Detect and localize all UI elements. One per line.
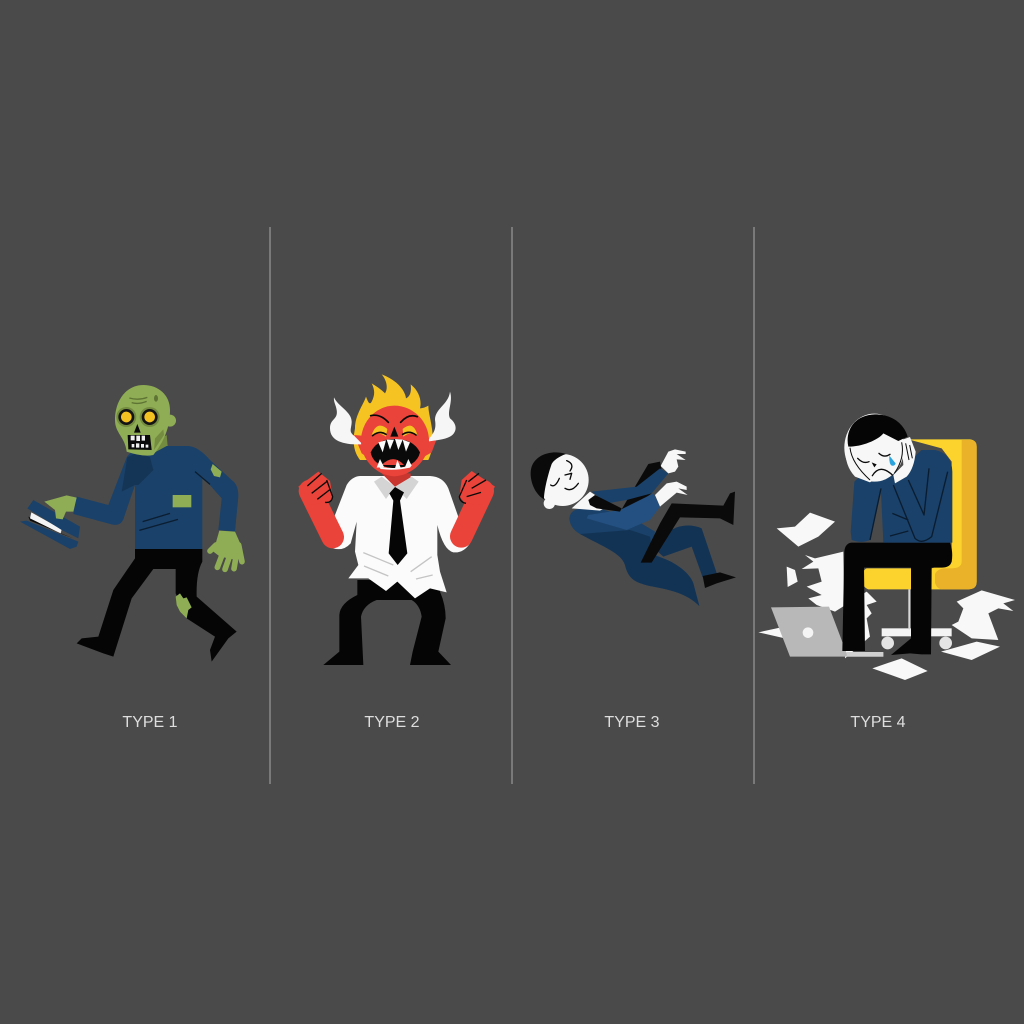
stapler base (20, 521, 78, 549)
figure: type 2 angry devil (298, 374, 495, 665)
sleeper hair (531, 452, 566, 499)
zombie mouth (128, 435, 152, 450)
label: type 3: TYPE 3 (604, 714, 660, 731)
devil arms (298, 471, 495, 537)
sleeper ear (544, 498, 555, 509)
right floor paper (941, 642, 1000, 660)
flying paper top (777, 513, 835, 547)
sweater patch (173, 495, 191, 507)
back arm (622, 462, 662, 512)
stapler (20, 500, 80, 549)
zombie teeth (131, 436, 148, 448)
front sleeve (587, 493, 660, 530)
top sleeve (592, 468, 668, 503)
tear (889, 456, 896, 466)
sleeper face (551, 461, 578, 490)
zombie neck (143, 435, 168, 464)
stapler top (27, 500, 80, 538)
devil nose (390, 427, 398, 437)
flame hair (354, 374, 433, 460)
bottom floor paper (872, 658, 928, 680)
near trouser leg (641, 492, 735, 563)
far shoe (703, 572, 736, 588)
shirt collar (374, 477, 419, 499)
black tie (389, 487, 407, 565)
figure: type 4 crying worker with papers (758, 414, 1015, 680)
devil shirt (324, 476, 470, 598)
jacket shadow (580, 530, 699, 606)
chair back shade (934, 440, 977, 589)
shirt collar and tie (572, 492, 610, 511)
label: type 2: TYPE 2 (364, 714, 420, 731)
worker head (844, 414, 904, 482)
zombie sweater (73, 446, 238, 549)
zombie hand with stapler (44, 495, 77, 519)
paper left of laptop (758, 628, 785, 638)
top hand (661, 449, 686, 473)
devil tongue (382, 459, 404, 465)
lower hand (655, 482, 688, 507)
zombie trousers (77, 549, 237, 662)
forehead marks (129, 397, 147, 403)
staple strip (30, 512, 62, 533)
cheek scar (154, 429, 164, 450)
zombie nose (134, 424, 141, 433)
far leg (647, 526, 717, 577)
zombie eyes (116, 407, 160, 427)
sleeper head (537, 454, 589, 506)
worker sweater (851, 450, 952, 543)
paper pile (802, 552, 877, 658)
label: type 4: TYPE 4 (850, 714, 906, 731)
figure: type 3 falling sleeper (531, 449, 736, 606)
zombie ear (164, 415, 176, 427)
sweater creases (139, 472, 210, 530)
label: type 1: TYPE 1 (122, 714, 178, 731)
left fist (298, 472, 333, 505)
right fist (459, 471, 495, 505)
devil trousers (323, 580, 451, 665)
chair seat (862, 568, 935, 589)
worker nose (872, 462, 877, 467)
shirt creases (363, 553, 433, 579)
worker hair (848, 414, 908, 447)
sweater lines (870, 468, 948, 541)
sweater shadow (122, 452, 153, 492)
smoke left (330, 397, 363, 444)
devil eyes (371, 415, 417, 437)
laptop (771, 607, 883, 657)
left hand on cheek (846, 447, 873, 482)
leg wound (176, 593, 192, 618)
devil mouth (371, 439, 420, 468)
right paper stack (952, 590, 1015, 640)
figure: type 1 zombie with stapler (20, 385, 242, 662)
devil head (361, 406, 429, 476)
right hand on cheek (893, 437, 916, 483)
devil teeth (377, 439, 412, 470)
worker face (858, 453, 892, 476)
sleeve hole (211, 464, 222, 477)
paper scrap (787, 567, 798, 587)
chair back (908, 439, 977, 589)
smoke right (427, 392, 456, 442)
chair base (881, 589, 952, 649)
devil neck (382, 473, 411, 488)
zombie dangling hand (210, 531, 242, 569)
devil ears (354, 435, 437, 460)
suit jacket (569, 507, 699, 606)
black tie (588, 495, 622, 512)
zombie head (115, 385, 170, 456)
worker trousers (842, 543, 952, 655)
